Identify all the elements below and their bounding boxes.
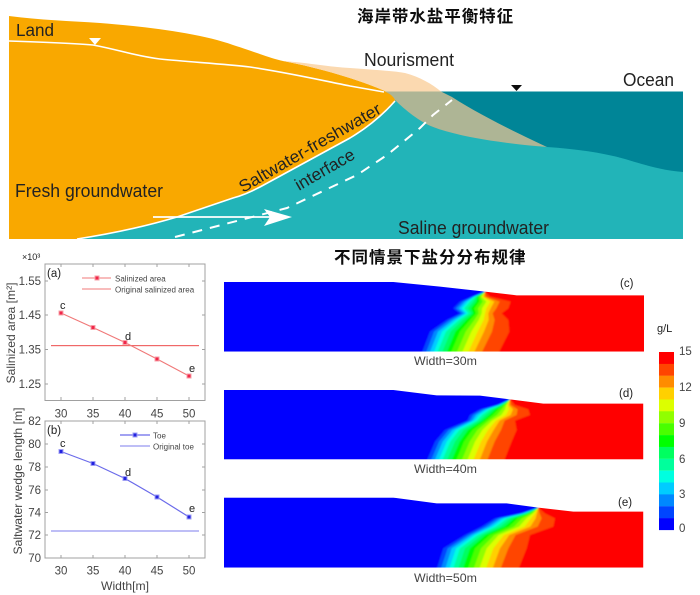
x tick labels: 30 bbox=[55, 408, 67, 420]
arrow: interface movement bbox=[153, 209, 292, 226]
y tick labels: 74 bbox=[28, 508, 42, 520]
panel: coastal cross-section diagram bbox=[9, 16, 683, 239]
point labels: d bbox=[125, 331, 131, 343]
colour bar labels: 15 bbox=[679, 346, 692, 358]
x axis title: Width[m] bbox=[101, 579, 149, 593]
title: coastal water-salt balance: 海岸带水盐平衡特征 bbox=[357, 7, 514, 26]
legend: Original salinized area bbox=[115, 286, 195, 294]
x tick labels: 40 bbox=[119, 408, 131, 420]
legend: Toe bbox=[153, 432, 166, 440]
y tick labels: 1.25 bbox=[19, 379, 41, 391]
label: Ocean: Ocean bbox=[623, 70, 674, 90]
original toe line bbox=[51, 530, 199, 532]
heading: salt distribution under scenarios: 不同情景下盐分分布规律 bbox=[334, 248, 526, 267]
colour bar labels: 6 bbox=[679, 454, 685, 466]
point labels bbox=[60, 300, 195, 375]
y tick labels bbox=[19, 276, 41, 391]
y tick labels: 1.45 bbox=[19, 310, 41, 322]
map caption: Width=30m: Width=30m bbox=[414, 354, 477, 368]
unit label: ×10³ bbox=[22, 252, 40, 262]
map caption: Width=50m: Width=50m bbox=[414, 571, 477, 585]
point labels: e bbox=[189, 363, 195, 375]
label: Saline groundwater: Saline groundwater bbox=[398, 218, 549, 238]
unit label: g/L bbox=[657, 323, 672, 335]
point labels: d bbox=[125, 467, 131, 479]
x tick labels: 45 bbox=[151, 566, 163, 578]
original salinized area line bbox=[51, 345, 199, 346]
saltwater-freshwater interface line bbox=[77, 101, 395, 239]
x tick labels: 35 bbox=[87, 408, 99, 420]
colour bar labels: 0 bbox=[679, 523, 685, 535]
x tick labels: 45 bbox=[151, 408, 163, 420]
salinity map d: width 40m bbox=[224, 390, 644, 460]
y tick labels: 82 bbox=[28, 416, 41, 428]
tick marks bbox=[45, 264, 205, 400]
x tick labels: 40 bbox=[119, 566, 131, 578]
icon: ocean level marker bbox=[511, 85, 522, 91]
x tick labels bbox=[55, 408, 195, 420]
x tick labels: 30 bbox=[55, 566, 67, 578]
land and fresh groundwater bbox=[9, 16, 395, 239]
y axis title: Salinized area [m²] bbox=[4, 283, 18, 383]
colour bar labels: 3 bbox=[679, 489, 685, 501]
salinized area series bbox=[59, 311, 191, 378]
label: Fresh groundwater: Fresh groundwater bbox=[15, 181, 163, 201]
icon: land water level marker bbox=[89, 38, 101, 45]
point labels: c bbox=[60, 300, 66, 312]
nourishment below sea level bbox=[385, 92, 547, 147]
point labels: e bbox=[189, 503, 195, 515]
x tick labels: 35 bbox=[87, 566, 99, 578]
y tick labels: 1.35 bbox=[19, 344, 41, 356]
colour bar labels: 9 bbox=[679, 418, 685, 430]
x tick labels: 50 bbox=[183, 408, 195, 420]
map caption: Width=40m: Width=40m bbox=[414, 462, 477, 476]
ocean water bbox=[392, 92, 683, 172]
tick marks bbox=[45, 421, 205, 558]
plot frame bbox=[45, 421, 205, 558]
legend bbox=[120, 432, 194, 452]
colour bar bbox=[659, 352, 674, 530]
water table line bbox=[9, 41, 384, 92]
y axis title: Saltwater wedge length [m] bbox=[11, 408, 25, 554]
legend bbox=[82, 274, 195, 294]
colour bar labels: 12 bbox=[679, 382, 692, 394]
x tick labels bbox=[55, 566, 195, 578]
point labels: c bbox=[60, 438, 66, 450]
legend: Original toe bbox=[153, 442, 194, 452]
toe series bbox=[59, 450, 191, 519]
chart b: saltwater wedge length vs width bbox=[11, 408, 205, 593]
colour bar labels bbox=[679, 346, 692, 535]
label: Saltwater-freshwater: Saltwater-freshwater bbox=[236, 99, 385, 196]
label: Nourisment: Nourisment bbox=[364, 50, 454, 70]
map tag (d): (d) bbox=[619, 388, 633, 400]
y tick labels: 1.55 bbox=[19, 276, 41, 288]
label: interface: interface bbox=[292, 145, 358, 194]
y tick labels bbox=[28, 416, 42, 565]
salinity map c: width 30m bbox=[224, 282, 644, 352]
y tick labels: 72 bbox=[28, 530, 41, 542]
point labels bbox=[60, 438, 195, 515]
plot frame bbox=[45, 264, 205, 400]
panel tag: (a) bbox=[47, 268, 61, 280]
colour legend bbox=[657, 323, 692, 535]
label: Land: Land bbox=[16, 20, 54, 40]
y tick labels: 76 bbox=[28, 485, 41, 497]
y tick labels: 80 bbox=[28, 439, 41, 451]
map tag (c): (c) bbox=[620, 278, 634, 290]
x tick labels: 50 bbox=[183, 566, 195, 578]
map tag (e): (e) bbox=[618, 497, 632, 509]
legend: Salinized area bbox=[115, 274, 166, 284]
y tick labels: 70 bbox=[28, 553, 41, 565]
saline groundwater body bbox=[77, 92, 683, 239]
y tick labels: 78 bbox=[28, 462, 41, 474]
salinity map e: width 50m bbox=[224, 498, 644, 568]
shifted interface dashed line bbox=[175, 100, 452, 237]
chart a: salinized area vs width bbox=[4, 252, 205, 420]
panel tag: (b) bbox=[47, 425, 61, 437]
nourishment above sea level bbox=[283, 61, 441, 92]
